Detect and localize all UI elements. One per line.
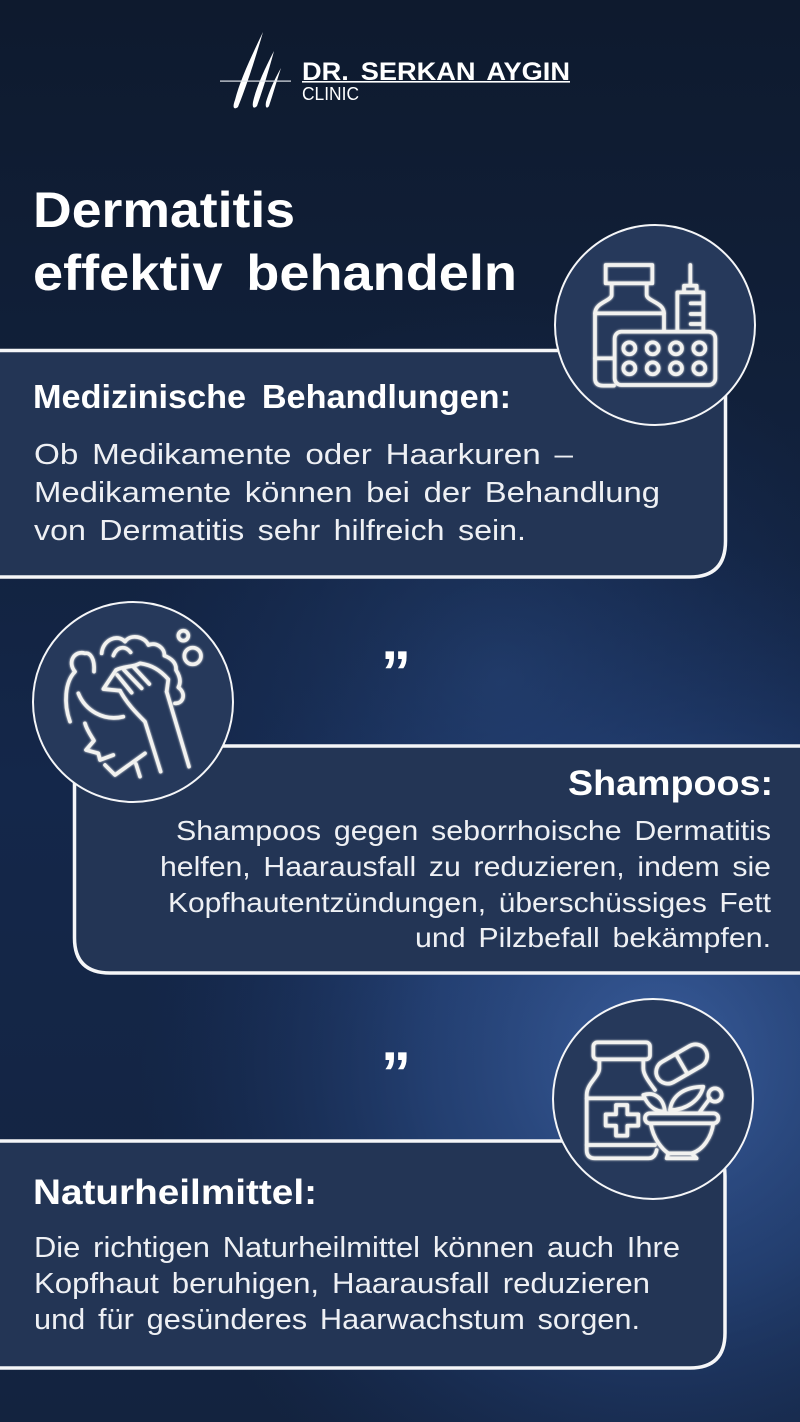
panel 3 body [34,1232,680,1336]
panel 1 body: Ob Medikamente oder Haarkuren – [34,439,574,471]
panel 1 heading: Medizinische Behandlungen: [33,378,511,415]
panel 3 body: Die richtigen Naturheilmittel können auch Ihre [34,1232,680,1264]
panel 2 body: und Pilzbefall bekämpfen. [415,922,771,953]
panel 1 box [0,350,726,577]
panel: Medizinische Behandlungen [0,350,726,577]
logo underline [302,81,570,83]
logo [220,32,570,108]
panel 3 body: und für gesünderes Haarwachstum sorgen. [34,1304,640,1336]
panel 1 body: Medikamente können bei der Behandlung [34,477,660,509]
panel 1 body [34,439,660,547]
logo mark: hair strokes [220,32,291,108]
panel 3 box [0,1141,725,1368]
panel 2 heading: Shampoos: [568,764,773,803]
panel 1 body: von Dermatitis sehr hilfreich sein. [34,515,526,547]
logo subtitle: CLINIC [302,84,359,104]
panel: Naturheilmittel [0,1141,725,1368]
panel 2 body: helfen, Haarausfall zu reduzieren, indem sie [160,851,771,882]
quote mark: ” [381,1040,411,1107]
title: effektiv behandeln [33,245,517,301]
panel 2 box [74,746,800,973]
icon: hair washing [33,602,233,802]
logo name: DR. SERKAN AYGIN [302,58,570,86]
panel 2 body: Kopfhautentzündungen, überschüssiges Fett [168,887,771,918]
icon: medicine bottle, capsule and mortar [553,999,753,1199]
panel 3 body: Kopfhaut beruhigen, Haarausfall reduzieren [34,1268,650,1300]
quote mark: ” [381,639,411,706]
panel 2 body [160,815,771,953]
title [33,182,517,301]
panel 2 body: Shampoos gegen seborrhoische Dermatitis [176,815,771,846]
title: Dermatitis [33,182,295,238]
panel 3 heading: Naturheilmittel: [33,1173,317,1212]
icon: medicine bottle, syringe and blister pack [555,225,755,425]
panel: Shampoos [74,746,800,973]
